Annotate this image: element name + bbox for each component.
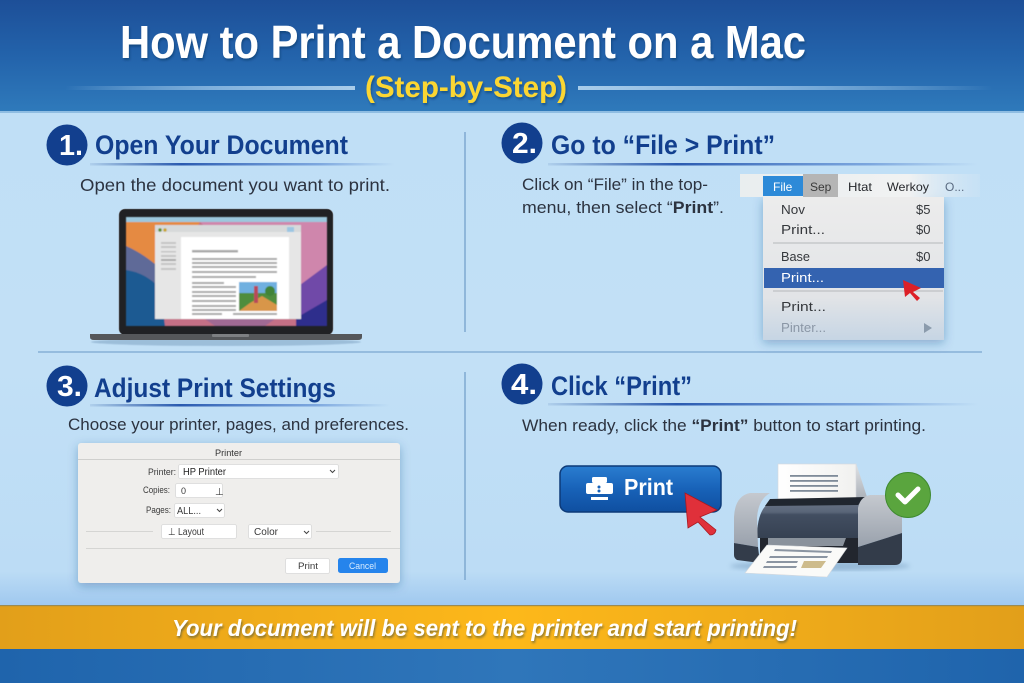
file menu screenshot: File — [773, 180, 793, 194]
left side — [734, 493, 770, 547]
step 2 text — [522, 176, 724, 217]
step 4 heading: Click “Print” — [551, 371, 692, 401]
step 3 number badge — [46, 366, 88, 406]
file menu screenshot: Print... — [781, 270, 824, 285]
file menu screenshot: Print... — [781, 299, 826, 314]
step 2 number badge: 2. — [512, 128, 537, 160]
print settings dialog: Pages: — [146, 505, 171, 515]
print settings dialog: ⊥ — [215, 487, 224, 498]
print settings dialog: Printer — [215, 448, 242, 459]
icon: green check badge — [886, 472, 930, 518]
file menu screenshot: Base — [781, 249, 810, 264]
step 1 number badge — [46, 124, 88, 166]
file menu screenshot: Sep — [810, 180, 832, 194]
step 4 text: When ready, click the “Print” button to start printing. — [522, 417, 926, 435]
red cursor — [903, 280, 921, 301]
file menu screenshot: Werkoy — [887, 180, 929, 194]
printed page — [745, 545, 847, 577]
step 3 heading: Adjust Print Settings — [94, 373, 336, 403]
step 2 text: Click on “File” in the top- — [522, 176, 708, 194]
file menu screenshot: Print... — [781, 222, 825, 237]
step 1 text: Open the document you want to print. — [80, 175, 390, 195]
panel: step 2 — [502, 122, 980, 340]
printer body — [757, 498, 860, 538]
print settings dialog — [78, 443, 400, 583]
step 4 number badge: 4. — [511, 369, 537, 401]
step 3 text: Choose your printer, pages, and preferences. — [68, 415, 409, 434]
paper in tray — [778, 463, 867, 500]
header banner — [0, 0, 1024, 113]
file menu screenshot: Pinter... — [781, 320, 826, 335]
print settings dialog: 0 — [181, 486, 186, 496]
print button: Print — [624, 474, 673, 500]
document photo — [239, 282, 277, 311]
print settings dialog: Color — [254, 527, 279, 538]
icon: printer glyph — [586, 477, 613, 500]
step 2 heading: Go to “File > Print” — [551, 130, 775, 160]
file menu screenshot: Htat — [848, 180, 873, 194]
step 1 number badge: 1. — [59, 130, 83, 162]
print settings dialog: ⊥ Layout — [168, 527, 204, 538]
print settings dialog: HP Printer — [183, 467, 227, 478]
laptop illustration — [90, 209, 362, 346]
file menu screenshot: $0 — [916, 222, 930, 237]
print button — [560, 466, 721, 535]
page background — [0, 112, 1024, 606]
print settings dialog: Cancel — [349, 561, 376, 572]
bottom banner — [0, 605, 1024, 649]
right side — [858, 495, 902, 547]
step 3 number badge: 3. — [57, 371, 82, 403]
subtitle: (Step-by-Step) — [365, 71, 567, 104]
file menu screenshot: $0 — [916, 249, 930, 264]
file menu screenshot: Nov — [781, 202, 806, 217]
panel: step 4 — [502, 364, 978, 577]
step 4 number badge — [502, 364, 542, 404]
print settings dialog: Printer: — [148, 467, 176, 477]
title: How to Print a Document on a Mac — [120, 16, 806, 68]
red cursor — [685, 493, 717, 535]
printer illustration — [730, 463, 930, 577]
step 2 text: menu, then select “ Print”. — [522, 199, 724, 217]
file menu screenshot — [740, 174, 980, 340]
step 2 number badge — [502, 122, 542, 164]
panel: step 1 — [46, 124, 395, 346]
print settings dialog: Print — [298, 561, 318, 572]
banner message: Your document will be sent to the printer and start printing! — [172, 615, 797, 641]
print settings dialog: Copies: — [143, 485, 170, 495]
file menu screenshot: O... — [945, 180, 964, 194]
panel: step 3 — [46, 366, 409, 583]
step 1 heading: Open Your Document — [95, 130, 348, 160]
print settings dialog: ALL... — [177, 506, 201, 517]
file menu screenshot: $5 — [916, 202, 930, 217]
footer strip — [0, 649, 1024, 683]
